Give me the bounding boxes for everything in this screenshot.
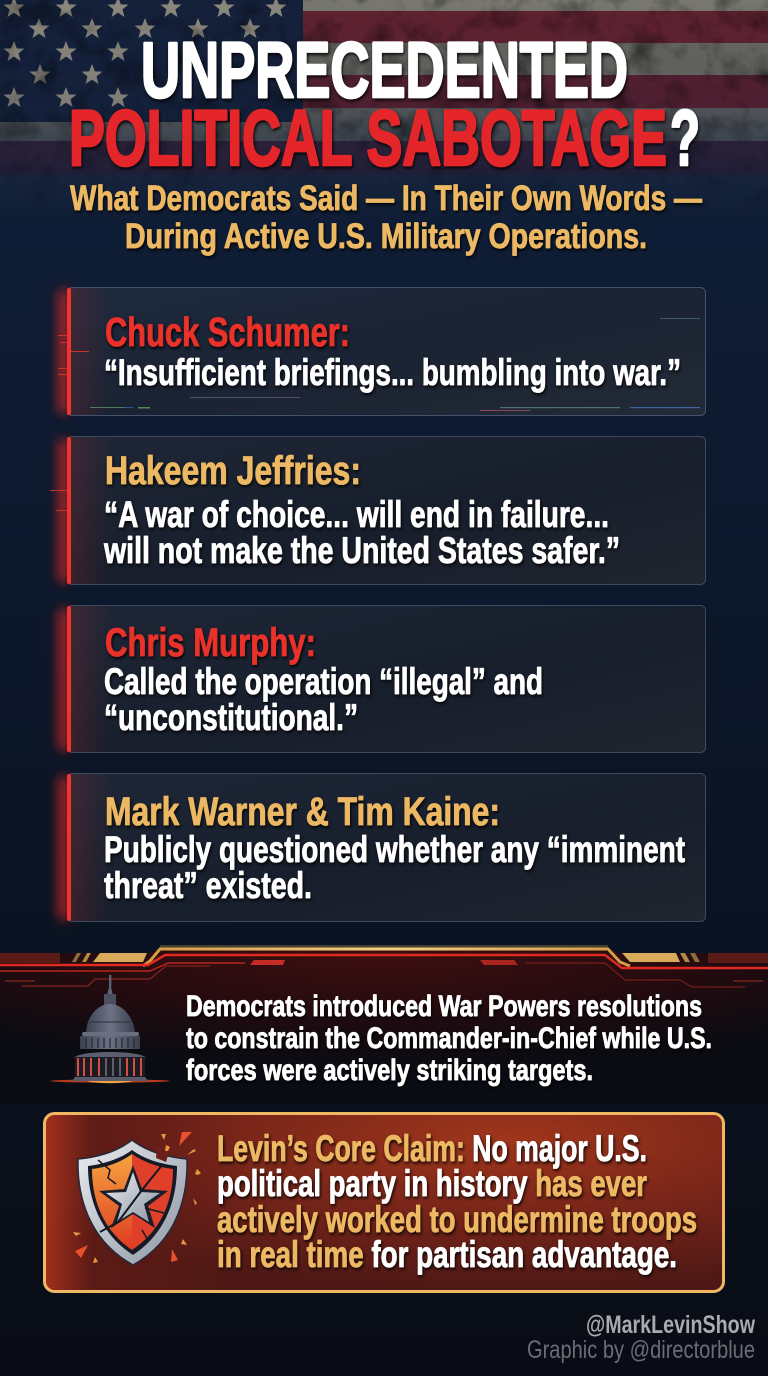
statement: Called the operation “illegal” and [104, 661, 543, 702]
statement: threat” existed. [104, 865, 312, 906]
panel: war powers band [0, 945, 768, 1104]
icon: cracked shield [73, 1132, 201, 1265]
title: ? [670, 93, 700, 182]
name: Hakeem Jeffries: [105, 449, 361, 493]
name: Mark Warner & Tim Kaine: [105, 790, 500, 834]
name: Chris Murphy: [105, 621, 316, 665]
panel: Mark Warner and Tim Kaine quote [60, 774, 706, 922]
subtitle: During Active U.S. Military Operations. [125, 217, 647, 256]
statement [104, 829, 685, 906]
statement [104, 661, 543, 738]
panel: Chuck Schumer quote [58, 288, 706, 416]
callout text: Levin’s Core Claim: No major U.S. [217, 1128, 647, 1169]
quote: will not make the United States safer.” [103, 530, 620, 571]
panel: Hakeem Jeffries quote [50, 436, 706, 584]
statement: “unconstitutional.” [104, 697, 358, 738]
panel: Chris Murphy quote [60, 606, 706, 752]
title [69, 25, 700, 182]
name: Chuck Schumer: [105, 309, 350, 355]
callout text: in real time for partisan advantage. [217, 1234, 677, 1275]
circuit frame [0, 945, 768, 987]
callout text: political party in history has ever [217, 1163, 647, 1204]
callout text [217, 1128, 697, 1275]
shield shards [75, 1132, 192, 1262]
callout: Levin's core claim [44, 1114, 724, 1292]
background: distressed american flag [0, 0, 768, 175]
icon: capitol building [50, 975, 170, 1083]
subtitle [70, 179, 702, 256]
quote [103, 494, 620, 571]
band text: forces were actively striking targets. [186, 1054, 593, 1087]
band text [186, 990, 712, 1087]
quote: “A war of choice... will end in failure... [104, 494, 609, 535]
footer credits [527, 1311, 755, 1364]
